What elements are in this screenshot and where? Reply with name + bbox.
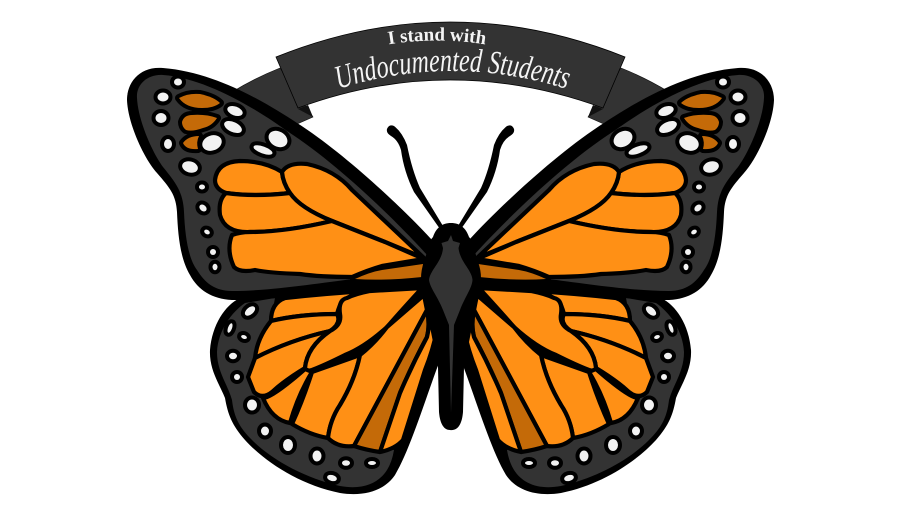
banner right tail (588, 68, 669, 124)
banner right fold (588, 105, 603, 117)
banner line two text: Undocumented Students (334, 49, 570, 88)
hindwing black outline (210, 285, 440, 494)
banner main band (276, 22, 625, 108)
right forewing (469, 68, 774, 300)
banner line one text: I stand with (387, 27, 486, 44)
banner left fold (298, 105, 313, 117)
body (421, 223, 481, 430)
hindwing grey margin (217, 298, 394, 487)
forewing white and brown spots (156, 78, 290, 270)
thorax and abdomen grey marking (429, 235, 472, 413)
banner (236, 22, 664, 124)
left antenna (387, 125, 443, 229)
right antenna (458, 125, 514, 229)
forewing black outline (127, 68, 432, 300)
left forewing (127, 68, 432, 300)
forewing orange cells (215, 161, 430, 288)
hindwing white spots (226, 304, 376, 482)
body black silhouette (421, 223, 481, 430)
forewing grey margin (137, 75, 428, 291)
left hindwing (210, 285, 440, 494)
banner left tail (232, 68, 313, 124)
right hindwing (461, 285, 691, 494)
hindwing orange cells (248, 288, 437, 452)
antennae (387, 125, 514, 229)
